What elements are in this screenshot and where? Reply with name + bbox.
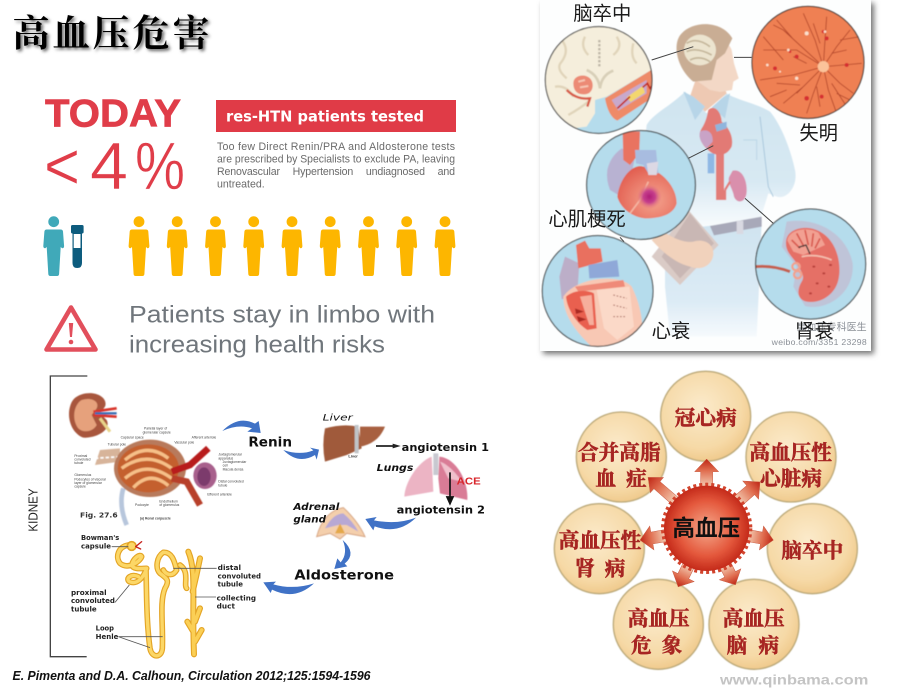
complication labels: 症: [626, 468, 647, 491]
warning message: increasing health risks: [129, 332, 385, 359]
panel: renin angiotensin aldosterone diagram: [27, 376, 489, 657]
corpuscle small labels: layer of glomerular: [74, 481, 103, 485]
description paragraph: [217, 141, 455, 191]
centre burst: [663, 485, 750, 572]
corpuscle small labels: Capsular space: [121, 436, 144, 440]
circle: damaged kidney: [755, 209, 866, 319]
description paragraph: Too few Direct Renin/PRA and Aldosterone tests: [217, 141, 455, 153]
organ: liver: [323, 425, 385, 462]
circle: heart failure: [542, 236, 653, 350]
circle: retina damage: [752, 6, 864, 118]
corpuscle small labels: tubule: [218, 483, 228, 487]
icon: tested patient: [43, 216, 64, 276]
labels: 脑卒中: [573, 3, 631, 25]
panel: today statistics: [43, 93, 456, 359]
description paragraph: untreated.: [217, 179, 265, 191]
corpuscle small labels: glomerular capsule: [143, 430, 171, 434]
corpuscle small labels: Juxtaglomerular: [218, 453, 243, 457]
complication labels: 病: [605, 558, 626, 581]
corpuscle small labels: of glomerulus: [159, 503, 180, 507]
complication labels: [559, 407, 843, 657]
labels: 心肌梗死: [548, 209, 626, 231]
organ: adrenal gland: [317, 508, 365, 539]
complication labels: 高血压: [723, 607, 785, 631]
description paragraph: are prescribed by Specialists to exclude PA, leaving: [217, 154, 455, 166]
big number: under 4 percent: [44, 129, 185, 204]
small liver caption: Liver: [348, 454, 358, 459]
corpuscle small labels: Proximal: [74, 454, 88, 458]
corpuscle small labels: Vascular pole: [174, 441, 194, 445]
corpuscle small labels: Glomerulus: [74, 473, 92, 477]
nephron labels: capsule: [81, 543, 111, 551]
complication labels: 高血压性: [559, 529, 642, 553]
corpuscle small labels: Macula densa: [223, 467, 244, 471]
circle: stroke in brain: [540, 20, 657, 133]
label: Adrenal gland: [292, 502, 340, 525]
corpuscle small labels: cell: [223, 464, 228, 468]
nephron labels: duct: [217, 602, 236, 610]
watermark: weibo.com/3351 23298: [771, 337, 867, 347]
label: ACE: ACE: [457, 476, 481, 487]
kidney bracket: [50, 376, 87, 657]
panel: target organ damage illustration: [540, 3, 867, 350]
complication labels: 血: [595, 468, 616, 491]
complication labels: 冠心病: [675, 407, 737, 430]
nephron leader lines: [112, 547, 217, 648]
corpuscle small labels: Endothelium: [159, 499, 178, 503]
corpuscle small labels: [74, 427, 247, 521]
nephron labels: Henle: [96, 633, 119, 641]
heading: TODAY: TODAY: [45, 93, 181, 136]
corpuscle small labels: Juxtaglomerular: [223, 460, 247, 464]
corpuscle small labels: (a) Renal corpuscle: [140, 517, 171, 521]
icon: warning triangle: [46, 308, 96, 350]
black arrow to angiotensin 2: [447, 472, 453, 504]
watermark: 高血压专科医生: [797, 321, 867, 334]
red banner: res-HTN patients tested: [226, 108, 424, 126]
nephron labels: convoluted: [71, 597, 115, 605]
corpuscle small labels: Distal convoluted: [218, 480, 244, 484]
illustration: nephron: [118, 542, 202, 656]
panel background: target organ illustration: [540, 0, 871, 351]
corpuscle small labels: Podocyte: [135, 503, 149, 507]
centre label: 高血压: [672, 515, 740, 541]
complication labels: 合并高脂: [578, 440, 661, 464]
complication labels: 脑卒中: [781, 540, 843, 563]
watermark: www.qinbama.com: [719, 671, 868, 687]
nephron labels: proximal: [71, 589, 107, 597]
complication labels: 危: [631, 634, 652, 657]
illustration: renal corpuscle: [95, 440, 217, 525]
corpuscle small labels: convoluted: [74, 457, 91, 461]
label: Aldosterone: Aldosterone: [294, 567, 394, 583]
icons: untested patients row: [129, 216, 455, 276]
organ: lungs: [404, 453, 467, 500]
label: Adrenal gland: gland: [293, 514, 326, 525]
title: 高血压危害: [12, 13, 212, 55]
complication labels: 病: [758, 634, 779, 657]
corpuscle small labels: Parietal layer of: [144, 427, 167, 431]
complication circles: [554, 371, 857, 669]
bracket label: KIDNEY: [27, 488, 41, 532]
corpuscle small labels: apparatus: [218, 456, 233, 460]
corpuscle small labels: Efferent arteriole: [207, 492, 232, 496]
panel: hypertension complications wheel: [554, 371, 868, 687]
labels: 失明: [799, 122, 838, 144]
man figure: [645, 24, 796, 337]
complication labels: 象: [662, 634, 683, 657]
citation: E. Pimenta and D.A. Calhoun, Circulation 2012;125:1594-1596: [12, 669, 372, 683]
big number: under 4 percent: 4: [90, 129, 128, 204]
complication labels: 肾: [575, 557, 595, 581]
red banner: [216, 100, 456, 132]
pointer lines: [620, 47, 773, 242]
corpuscle small labels: Tubular pole: [108, 442, 126, 446]
complication labels: 高血压性: [749, 440, 832, 464]
corpuscle small labels: Afferent arteriole: [192, 436, 216, 440]
nephron labels: [71, 534, 261, 641]
circle: myocardial infarction heart: [587, 131, 695, 239]
icon: kidney cross-section: [69, 393, 117, 438]
complication labels: 高血压: [628, 607, 690, 631]
nephron labels: collecting: [217, 594, 256, 602]
label: angiotensin 2: angiotensin 2: [397, 503, 485, 516]
watermark: [771, 321, 867, 347]
big number: under 4 percent: <: [44, 129, 80, 204]
big number: under 4 percent: %: [135, 129, 185, 204]
blue arrows: [222, 421, 416, 594]
label: Liver: Liver: [323, 413, 354, 423]
label: Adrenal gland: Adrenal: [292, 502, 340, 513]
label: angiotensin 1: angiotensin 1: [402, 441, 489, 454]
labels: 肾衰: [795, 320, 834, 342]
nephron labels: Bowman's: [81, 534, 119, 542]
nephron labels: tubule: [218, 581, 243, 589]
corpuscle small labels: capsule: [74, 485, 86, 489]
complication labels: 心脏病: [760, 468, 822, 491]
corpuscle small labels: tubule: [74, 461, 84, 465]
corpuscle small labels: Podocytes of visceral: [74, 477, 106, 481]
nephron labels: distal: [218, 564, 241, 572]
nephron labels: tubule: [71, 605, 97, 613]
complication labels: 脑: [727, 634, 747, 657]
arrows from centre: [638, 459, 775, 592]
black arrow to angiotensin 1: [376, 443, 394, 448]
icon: test tube: [71, 225, 84, 268]
label: Lungs: Lungs: [377, 463, 414, 474]
nephron labels: Loop: [96, 624, 114, 632]
labels: [548, 3, 838, 342]
description paragraph: Renovascular Hypertension undiagnosed and: [217, 166, 455, 178]
figure caption: Fig. 27.6: [80, 511, 118, 519]
warning message: Patients stay in limbo with: [129, 302, 435, 329]
warning message: [129, 302, 435, 359]
arrow head: [393, 444, 401, 448]
flow label: Renin: Renin: [248, 435, 292, 451]
labels: 心衰: [652, 320, 690, 342]
nephron labels: convoluted: [218, 572, 261, 580]
